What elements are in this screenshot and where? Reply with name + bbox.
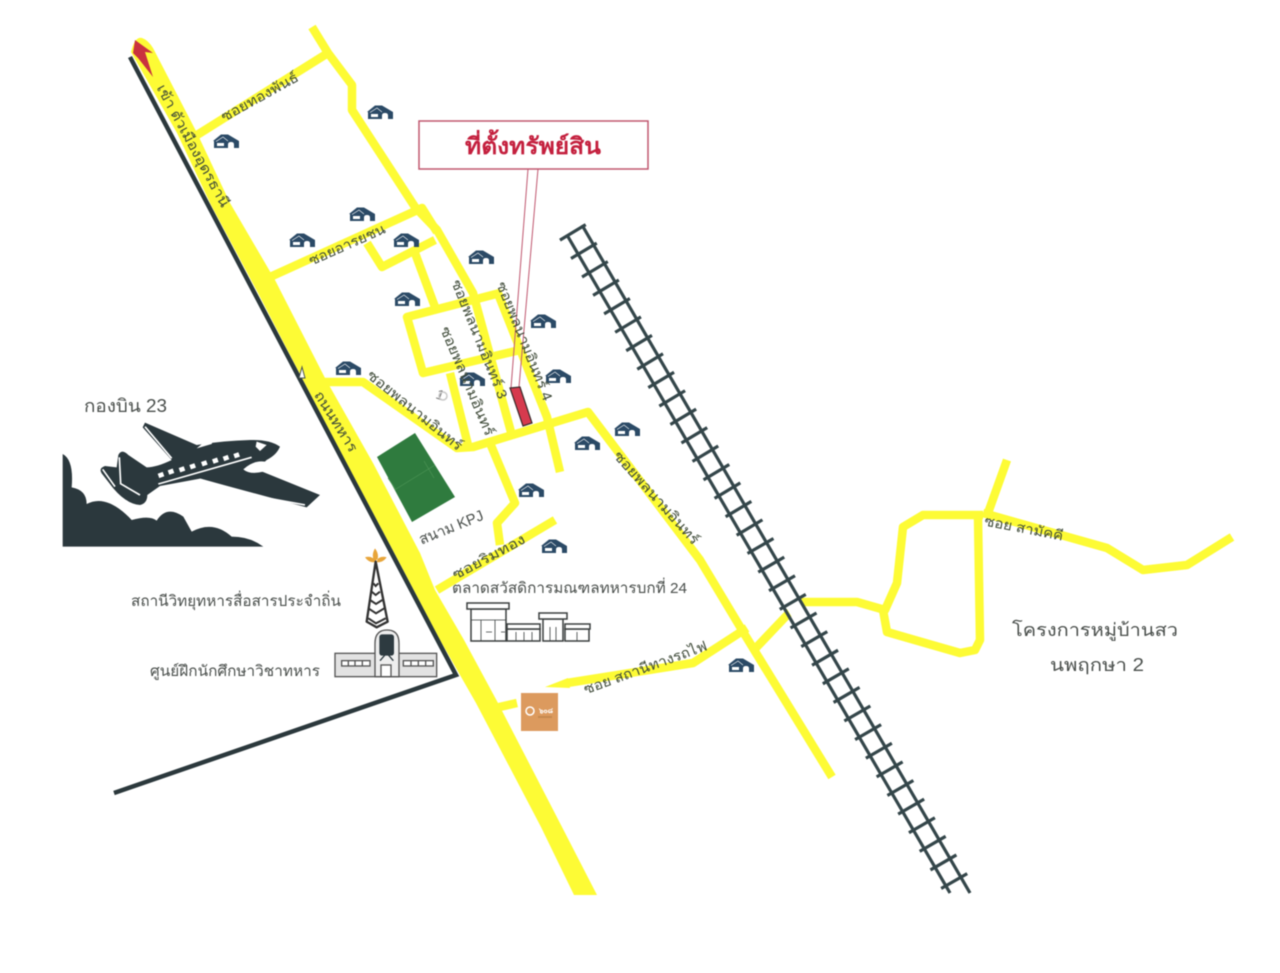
road label: Soi Samakkhi: ซอย สามัคคี [983,513,1065,544]
side roads [197,27,1232,777]
label: field KPJ: สนาม KPJ [417,507,486,548]
road label: to Udon Thani: เข้า ตัวเมืองอุดรธานี [153,82,233,211]
football field [377,433,455,522]
label: market: ตลาดสวัสดิการมณฑลทหารบกที่ 24 [452,577,687,597]
road label: Soi Arayachon: ซอยอารยชน [306,220,388,268]
small boundary marker [299,367,305,378]
road label: Thanon Thahan: ถนนทหาร [311,388,362,455]
icon: airplane and clouds [63,423,320,547]
label: training center: ศูนย์ฝึกนักศึกษาวิชาทหาร [150,663,320,680]
label: radio station: สถานีวิทยุทหารสื่อสารประจำถิ่น [131,590,341,611]
road label: middle Soi: ซอยพลนามอินทร์ [437,324,498,439]
callout: property location [419,121,648,169]
road taper: station soi end [545,678,570,688]
road label: railway station soi: ซอย สถานีทางรถไฟ [581,638,709,697]
houses [213,106,754,672]
main highway road [131,38,597,895]
callout: property location: ที่ตั้งทรัพย์สิน [465,129,601,159]
road label: Soi 4: ซอยพลนามอินทร์ 4 [493,279,556,403]
military area boundary line [114,57,456,793]
label: housing project line 1: โครงการหมู่บ้านสว [1012,619,1178,641]
icon: market building [467,603,590,641]
callout pointer lines [511,169,538,388]
label: Wing 23: กองบิน 23 [84,396,167,416]
property location marker [510,387,532,426]
railway [567,225,970,893]
icon: orange logo sign [521,693,558,731]
label: housing project line 2: นพฤกษา 2 [1050,655,1144,675]
icon: radio tower [365,548,388,627]
icon: training center building [335,630,437,677]
road label: left Soi: ซอยพลนามอินทร์ [364,367,466,454]
label: soi number 1: 1 [434,386,447,404]
road label: Soi 3: ซอยพลนามอินทร์ 3 [448,277,511,401]
road label: Soi Thong Phan: ซอยทองพันธ์ [218,69,301,124]
icon: orange logo sign: ๖๐๘ [538,708,554,715]
arrow: direction to Udon Thani [133,40,153,77]
road label: right Soi: ซอยพลนามอินทร์ [611,448,703,548]
road label: Soi Rim Thong: ซอยริมทอง [450,531,528,582]
